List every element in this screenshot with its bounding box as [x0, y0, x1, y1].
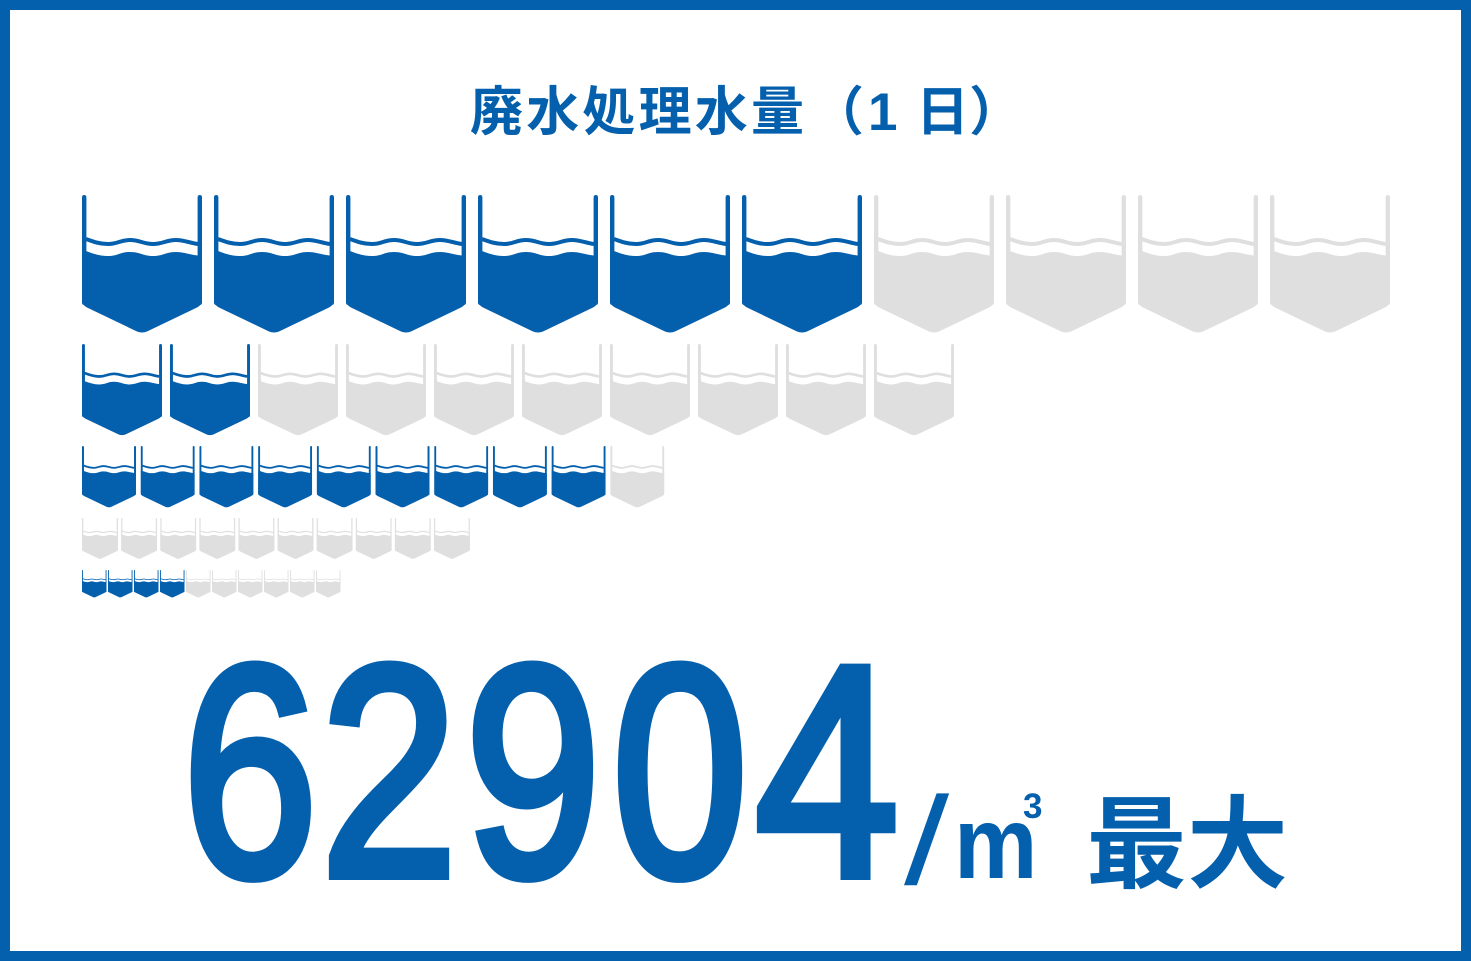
icon: tank filled	[82, 344, 162, 435]
icon: tank empty	[610, 446, 664, 507]
icon: tank empty	[199, 518, 235, 559]
icon: tank empty	[186, 570, 210, 597]
big number: 62904: 6	[182, 604, 318, 939]
icon: tank empty	[316, 570, 340, 597]
icon: tank empty	[356, 518, 392, 559]
big number: 62904: 4	[755, 605, 899, 939]
icon: tank empty	[434, 344, 514, 435]
icon: tank filled	[82, 570, 106, 597]
icon: tank filled	[478, 195, 598, 332]
icon: tank empty	[238, 518, 274, 559]
icon: tank empty	[786, 344, 866, 435]
icon: tank empty	[698, 344, 778, 435]
title	[470, 83, 1022, 142]
icon: tank filled	[317, 446, 371, 507]
unit: per cubic metre: /	[904, 771, 950, 911]
row: smallest tanks, 4 of 10 filled	[82, 570, 340, 597]
icon: tank empty	[278, 518, 314, 559]
icon: tank filled	[141, 446, 195, 507]
icon: tank filled	[258, 446, 312, 507]
row: medium tanks, 9 of 10 filled	[82, 446, 664, 507]
big number: 62904: 2	[321, 605, 457, 940]
unit: per cubic metre: 3	[1023, 787, 1042, 826]
icon: tank empty	[395, 518, 431, 559]
icon: tank filled	[170, 344, 250, 435]
icon: tank empty	[346, 344, 426, 435]
icon: tank filled	[610, 195, 730, 332]
icon: tank filled	[376, 446, 430, 507]
row: small tanks, 0 of 10 filled	[82, 518, 470, 559]
label: maximum: 最大	[1086, 790, 1288, 902]
icon: tank empty	[238, 570, 262, 597]
icon: tank filled	[214, 195, 334, 332]
icon: tank filled	[108, 570, 132, 597]
icon: tank filled	[199, 446, 253, 507]
icon: tank empty	[1270, 195, 1390, 332]
icon: tank empty	[258, 344, 338, 435]
icon: tank empty	[290, 570, 314, 597]
unit: per cubic metre: m	[954, 785, 1037, 900]
icon: tank filled	[160, 570, 184, 597]
row: largest tanks, 6 of 10 filled	[82, 195, 1390, 332]
unit: per cubic metre	[904, 771, 1042, 911]
icon: tank empty	[1138, 195, 1258, 332]
row: large tanks, 2 of 10 filled	[82, 344, 954, 435]
icon: tank filled	[493, 446, 547, 507]
big number: 62904: 0	[612, 604, 748, 939]
icon: tank empty	[317, 518, 353, 559]
icon: tank empty	[874, 344, 954, 435]
title: ）	[969, 83, 1022, 142]
icon: tank filled	[742, 195, 862, 332]
icon: tank empty	[121, 518, 157, 559]
icon: tank filled	[552, 446, 606, 507]
big number: 62904: 9	[465, 604, 601, 939]
icon: tank filled	[82, 446, 136, 507]
icon: tank empty	[610, 344, 690, 435]
icon: tank filled	[82, 195, 202, 332]
big number: 62904	[182, 604, 899, 940]
icon: tank empty	[82, 518, 118, 559]
icon: tank empty	[212, 570, 236, 597]
icon: tank empty	[1006, 195, 1126, 332]
title: （	[811, 83, 864, 142]
icon: tank filled	[434, 446, 488, 507]
icon: tank empty	[160, 518, 196, 559]
title: 廃水処理水量	[470, 83, 807, 142]
icon: tank empty	[264, 570, 288, 597]
icon: tank filled	[134, 570, 158, 597]
icon: tank empty	[874, 195, 994, 332]
icon: tank empty	[434, 518, 470, 559]
title: 1	[868, 83, 897, 142]
title: 日	[916, 83, 969, 142]
icon: tank empty	[522, 344, 602, 435]
icon: tank filled	[346, 195, 466, 332]
